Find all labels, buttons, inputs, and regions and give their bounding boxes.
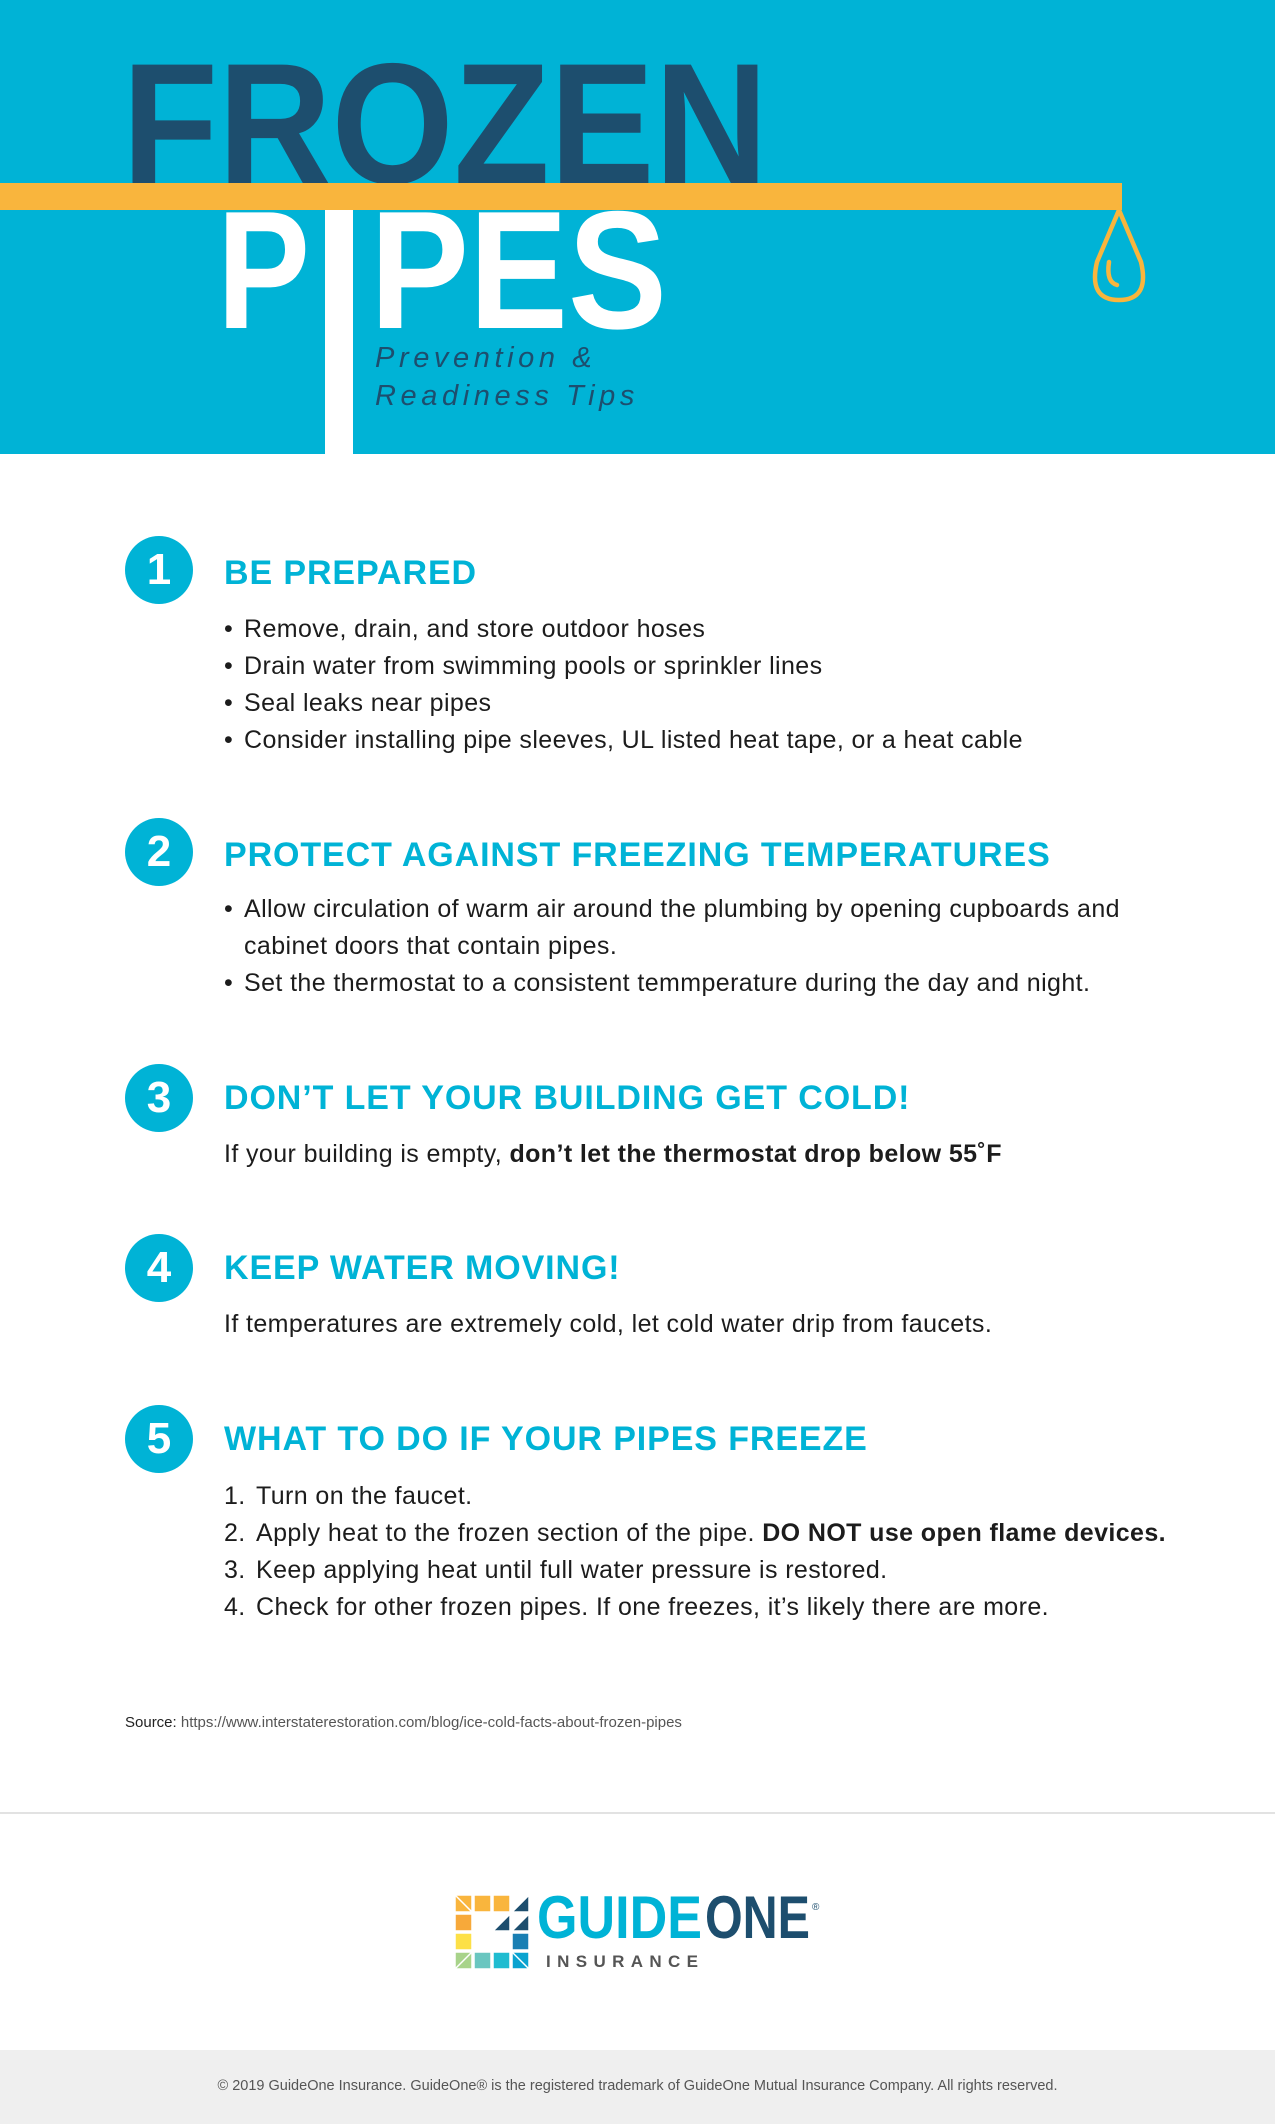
subtitle: Readiness Tips <box>375 380 639 412</box>
title: PIPES: PES <box>370 176 667 364</box>
section 3: building cold <box>125 1064 1002 1168</box>
logo: GuideOne Insurance: ® <box>812 1902 820 1913</box>
heading 3: DON’T LET YOUR BUILDING GET COLD! <box>224 1079 910 1117</box>
logo: GuideOne Insurance: INSURANCE <box>546 1952 698 1971</box>
bullet list 2: Set the thermostat to a consistent temmperature during the day and night. <box>244 969 1090 997</box>
text 3: If your building is empty, don’t let the thermostat drop below 55˚F <box>224 1140 1002 1168</box>
bullet list 2 <box>225 895 1120 997</box>
bullet list 1: Drain water from swimming pools or sprinkler lines <box>244 652 822 680</box>
number badge 1: 1 <box>147 545 171 594</box>
logo mark <box>455 1895 529 1969</box>
subtitle: Prevention & <box>375 342 596 374</box>
subtitle <box>375 342 639 412</box>
heading 2: PROTECT AGAINST FREEZING TEMPERATURES <box>224 836 1051 874</box>
section 4: water moving <box>125 1234 992 1338</box>
numbered list 5: Turn on the faucet. <box>256 1482 473 1510</box>
number badge 1 <box>125 536 193 604</box>
footer copyright: © 2019 GuideOne Insurance. GuideOne® is the registered trademark of GuideOne Mutual Insurance Company. All rights reserved. <box>218 2078 1057 2094</box>
bullet list 1: Remove, drain, and store outdoor hoses <box>244 615 705 643</box>
header banner <box>0 0 1275 454</box>
number badge 2: 2 <box>147 827 171 876</box>
title: PIPES: P <box>217 176 310 364</box>
section 5: pipes freeze <box>125 1405 1166 1621</box>
number badge 3: 3 <box>147 1073 171 1122</box>
number badge 2 <box>125 818 193 886</box>
section 1: be prepared <box>125 536 1023 754</box>
number badge 4: 4 <box>147 1243 171 1292</box>
footer band <box>0 2050 1275 2124</box>
bullet list 2: Allow circulation of warm air around the plumbing by opening cupboards and <box>244 895 1120 923</box>
numbered list 5: 2. <box>224 1519 246 1547</box>
number badge 5: 5 <box>147 1414 171 1463</box>
number badge 3 <box>125 1064 193 1132</box>
numbered list 5: Check for other frozen pipes. If one freezes, it’s likely there are more. <box>256 1593 1049 1621</box>
section 2: protect <box>125 818 1120 997</box>
bullet list 1: Seal leaks near pipes <box>244 689 491 717</box>
text 4: If temperatures are extremely cold, let cold water drip from faucets. <box>224 1310 992 1338</box>
numbered list 5: Apply heat to the frozen section of the pipe. DO NOT use open flame devices. <box>256 1519 1166 1547</box>
logo: GuideOne Insurance <box>456 1888 820 1971</box>
white vertical pipe <box>325 205 353 454</box>
bullet list 1: Consider installing pipe sleeves, UL listed heat tape, or a heat cable <box>244 726 1023 754</box>
numbered list 5: 1. <box>224 1482 246 1510</box>
numbered list 5: 4. <box>224 1593 246 1621</box>
bullet list 2: cabinet doors that contain pipes. <box>244 932 617 960</box>
orange horizontal pipe <box>0 183 1122 210</box>
number badge 4 <box>125 1234 193 1302</box>
bullet list 1 <box>225 615 1023 754</box>
numbered list 5 <box>224 1482 1166 1621</box>
title: PIPES <box>217 176 667 364</box>
title: FROZEN: FROZEN <box>122 28 768 220</box>
numbered list 5: Keep applying heat until full water pressure is restored. <box>256 1556 887 1584</box>
source note: Source: https://www.interstaterestoration.com/blog/ice-cold-facts-about-frozen-pipes <box>125 1714 682 1731</box>
icon: water drop <box>1095 210 1143 300</box>
heading 4: KEEP WATER MOVING! <box>224 1249 621 1287</box>
heading 1: BE PREPARED <box>224 554 477 592</box>
heading 5: WHAT TO DO IF YOUR PIPES FREEZE <box>224 1420 868 1458</box>
numbered list 5: 3. <box>224 1556 246 1584</box>
number badge 5 <box>125 1405 193 1473</box>
